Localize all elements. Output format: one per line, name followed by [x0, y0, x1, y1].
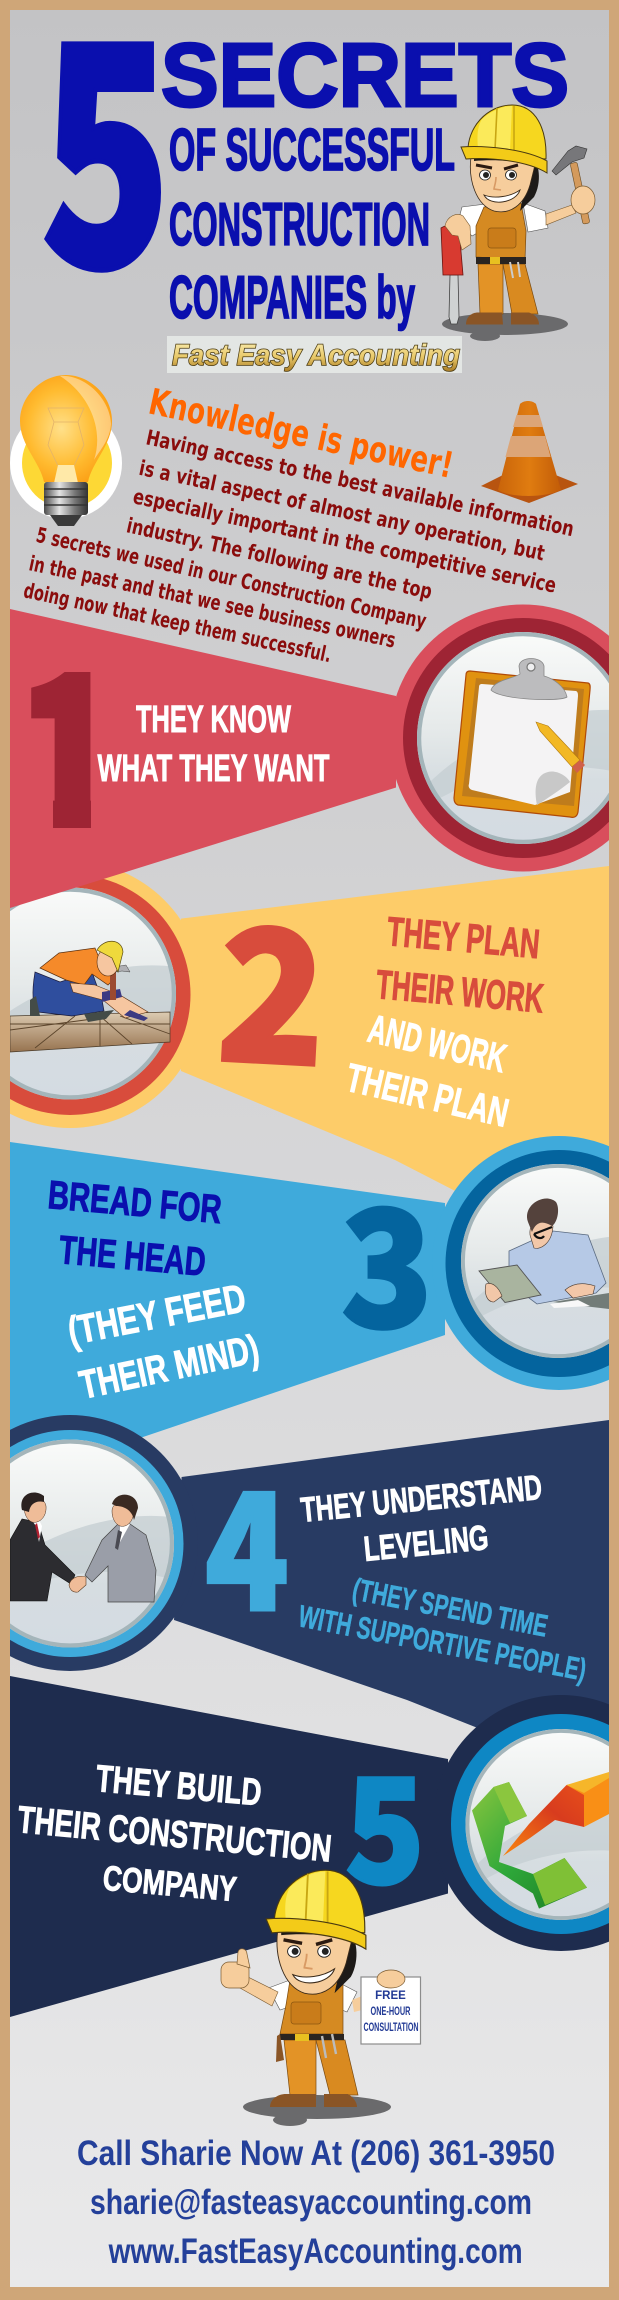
- panel: secret 3 blue band: [10, 1136, 609, 1438]
- text: the head: THE HEAD: [57, 1228, 207, 1285]
- sign: free one-hour consultation: FREE: [375, 1990, 406, 2002]
- numeral 3: 3: [341, 1139, 433, 1374]
- intro line 7: doing now that keep them successful.: [21, 578, 334, 667]
- text: bread for: BREAD FOR: [46, 1173, 223, 1232]
- contact block: [77, 2134, 555, 2271]
- logo: Fast Easy Accounting: Fast Easy Accounting: [172, 339, 460, 372]
- panel: secret 4 navy band: [10, 1415, 609, 1728]
- intro line 5: 5 secrets we used in our Construction Company: [34, 523, 429, 633]
- numeral 5: 5: [345, 1715, 425, 1925]
- icon: light bulb on yellow circle: [10, 375, 122, 526]
- panel: secret 2 yellow band: [10, 866, 609, 1191]
- sign: free one-hour consultation: CONSULTATION: [364, 2022, 418, 2034]
- panel: secret 5 dark navy band: [10, 1676, 619, 2017]
- illustration: worker holding consultation sign: [221, 1870, 420, 2126]
- illustration: construction worker with jackhammer and hammer: [441, 105, 595, 341]
- title line: companies by: COMPANIES by: [169, 264, 415, 331]
- image disc: clipboard: [417, 632, 619, 844]
- text: what they want: WHAT THEY WANT: [98, 748, 330, 790]
- text: they feed: (THEY FEED: [64, 1276, 249, 1354]
- sign: free one-hour consultation: ONE-HOUR: [370, 2006, 411, 2018]
- image disc: man with tablet: [461, 1164, 619, 1358]
- image disc: growth arrows: [466, 1729, 619, 1920]
- text: their plan: THEIR PLAN: [342, 1056, 513, 1136]
- sign: free one-hour consultation: [361, 1977, 420, 2044]
- numeral 1: 1: [17, 580, 121, 900]
- image disc: handshake: [0, 1440, 174, 1648]
- text: they build: THEY BUILD: [94, 1758, 263, 1814]
- heading: Knowledge is power: Knowledge is power!: [145, 382, 457, 487]
- icon: traffic cone: [481, 401, 578, 503]
- text: leveling: LEVELING: [362, 1518, 490, 1569]
- text: their mind: THEIR MIND): [76, 1327, 263, 1408]
- numeral 4: 4: [205, 1422, 289, 1657]
- intro paragraph: [21, 425, 576, 667]
- text: they know: THEY KNOW: [136, 699, 291, 741]
- intro line 6: in the past and that we see business owners: [27, 551, 398, 653]
- contact: website: www.FastEasyAccounting.com: [108, 2232, 523, 2271]
- numeral 2: 2: [212, 847, 334, 1119]
- text: company: COMPANY: [101, 1859, 238, 1909]
- title: [41, 0, 569, 355]
- text: and work: AND WORK: [364, 1007, 510, 1081]
- image disc: roofer: [0, 888, 176, 1100]
- intro line 4: industry. The following are the top: [124, 513, 434, 604]
- title word SECRETS: SECRETS: [161, 26, 569, 126]
- text: their construction: THEIR CONSTRUCTION: [16, 1799, 333, 1871]
- text: they plan: THEY PLAN: [385, 908, 542, 967]
- panel: secret 1 red band: [10, 580, 619, 908]
